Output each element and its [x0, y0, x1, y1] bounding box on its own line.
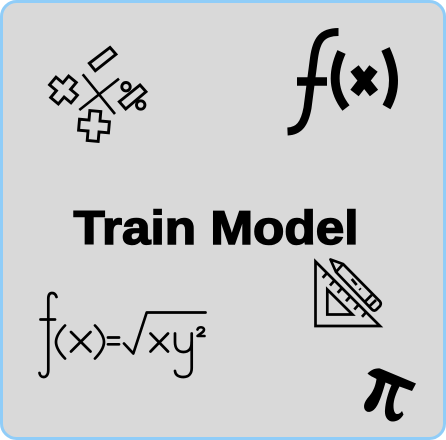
icon: math operators [44, 48, 146, 142]
icon: set square and pencil [316, 260, 381, 326]
icon: pi symbol [364, 368, 416, 422]
icon: formula f(x) equals root xy squared [40, 293, 206, 377]
title: Train Model [74, 201, 358, 254]
icon: f(x) [288, 32, 394, 132]
